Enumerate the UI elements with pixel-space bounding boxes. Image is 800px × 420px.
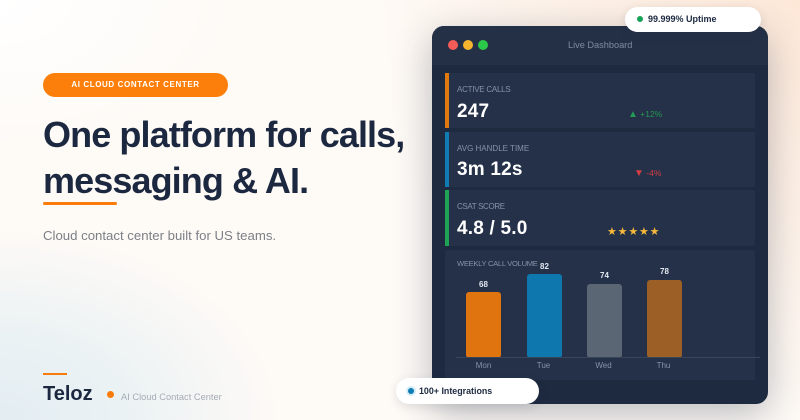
window control: yellow [463,40,473,50]
value 74: 74 [600,271,609,280]
day Tue: Tue [537,361,550,370]
bar Wed [587,284,622,358]
accent bar [445,132,449,187]
star rating: ★★★★★ [607,226,660,238]
chart label: WEEKLY CALL VOLUME [457,259,538,268]
badge: AI Cloud Contact Center [43,73,228,97]
value: 247 [457,101,489,122]
title [43,114,404,201]
value: 4.8 / 5.0 [457,218,527,239]
label: ACTIVE CALLS [457,85,510,94]
day Mon: Mon [476,361,491,370]
trend up: ▲ +12% [628,109,662,120]
day Wed: Wed [595,361,612,370]
title: One platform for calls, [43,114,404,155]
value: 3m 12s [457,159,523,180]
window title bar [432,26,768,65]
subtitle: Cloud contact center built for US teams. [43,228,276,243]
day Thu: Thu [657,361,670,370]
panel: active calls [445,73,755,128]
badge: AI Cloud Contact Center: AI CLOUD CONTACT CENTER [71,80,200,89]
chart baseline [456,357,760,358]
label: CSAT SCORE [457,202,505,211]
brand name: Teloz [43,383,93,405]
label: AVG HANDLE TIME [457,144,529,153]
brand tagline: AI Cloud Contact Center [121,392,222,402]
panel: live dashboard [432,26,768,404]
panel: weekly call volume chart [445,250,755,380]
integrations text: 100+ Integrations [419,386,492,396]
accent bar [445,73,449,128]
trend down: ▼ -4% [634,168,661,179]
bar Thu [647,280,682,358]
value 82: 82 [540,262,549,271]
panel: average handle time [445,132,755,187]
accent bar [445,190,449,246]
pill: uptime [625,7,761,32]
uptime text: 99.999% Uptime [648,14,717,24]
pill: integrations [396,378,539,404]
bar Tue [527,274,562,358]
window control: green [478,40,488,50]
bar Mon [466,292,501,358]
panel: CSAT score [445,190,755,246]
title underline accent [43,202,117,205]
brand accent line [43,373,67,375]
status dot [408,388,414,394]
bar chart [456,262,760,370]
value 68: 68 [479,280,488,289]
title: messaging & AI. [43,160,308,201]
value 78: 78 [660,267,669,276]
window control: red [448,40,458,50]
window title: Live Dashboard [568,40,632,50]
brand dot [107,391,114,398]
status dot [637,16,643,22]
